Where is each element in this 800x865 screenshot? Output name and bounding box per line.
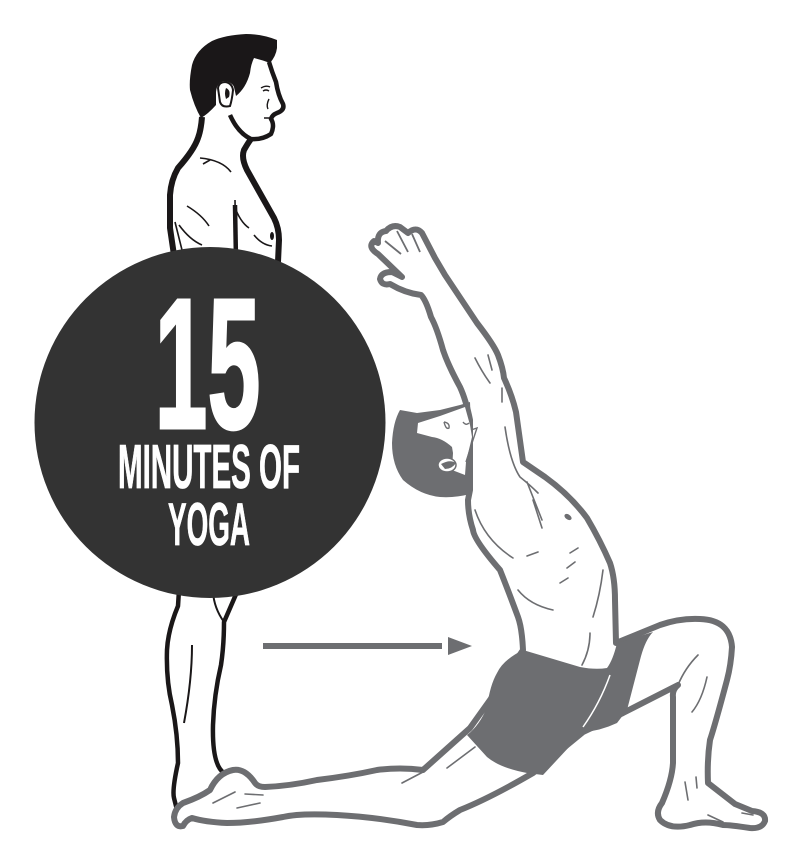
lunge eye details — [444, 422, 477, 462]
lunge head hair — [392, 402, 472, 497]
standing man right arm line — [235, 205, 236, 260]
lunge face — [417, 407, 472, 475]
dark circle callout: MINUTES OF — [118, 433, 300, 502]
standing man upper body outline — [170, 117, 279, 262]
standing man leg outlines — [167, 590, 237, 810]
arrow from standing man to lunge — [263, 637, 472, 655]
standing man face — [230, 62, 283, 139]
standing man legs — [167, 590, 237, 810]
standing man ear — [218, 82, 233, 106]
lunge ear inner — [441, 461, 456, 469]
circle background — [34, 247, 386, 598]
standing man facial features — [261, 86, 273, 118]
figure: standing man (before yoga) — [167, 34, 283, 810]
arrow shaft — [263, 643, 442, 649]
lunge ear — [438, 458, 456, 472]
figure: man in yoga lunge (after yoga) — [174, 226, 765, 828]
lunge muscle details — [213, 355, 753, 822]
standing man chest details — [175, 158, 272, 260]
standing man nipple — [270, 232, 274, 240]
dark circle callout — [34, 247, 386, 598]
lunge nipple — [563, 513, 573, 521]
dark circle callout: YOGA — [168, 491, 250, 558]
big number 15: 15 — [154, 261, 260, 468]
lunge hand finger lines — [385, 231, 420, 278]
lunge shorts — [467, 632, 653, 775]
arrow head — [448, 637, 472, 655]
lunge body outline — [174, 226, 765, 828]
standing man hair — [190, 34, 277, 118]
lunge shorts highlight — [583, 675, 610, 727]
standing man ear inner — [225, 88, 230, 99]
standing man knee and calf details — [184, 592, 224, 723]
